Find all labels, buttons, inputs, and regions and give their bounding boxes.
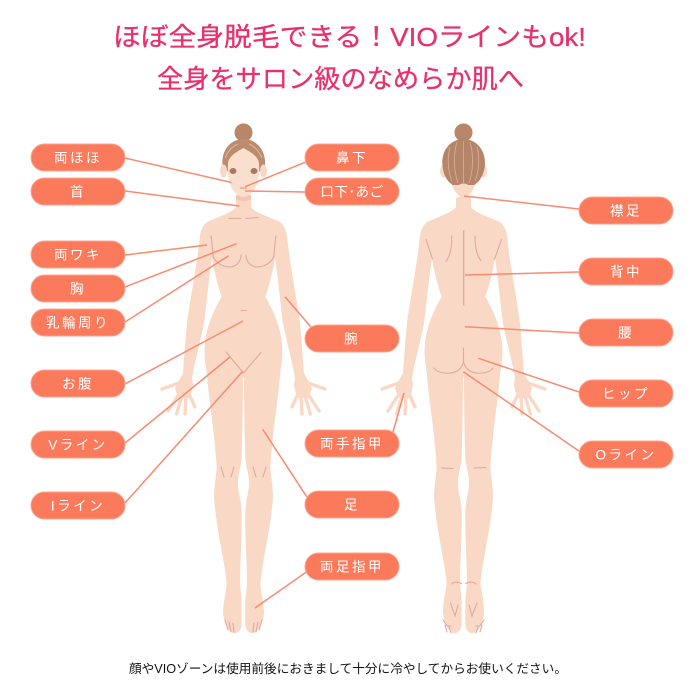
label: Vライン — [31, 431, 125, 458]
label: Oライン: Oライン — [595, 448, 657, 462]
label: 乳輪周り: 乳輪周り — [46, 316, 110, 330]
label: Vライン: Vライン — [48, 438, 108, 452]
label: ヒップ — [579, 380, 673, 407]
label: 足: 足 — [344, 498, 360, 512]
leader lines — [125, 158, 579, 608]
label: 胸 — [31, 275, 125, 302]
label: Iライン: Iライン — [51, 498, 105, 514]
label: Oライン — [579, 441, 673, 468]
hair highlights — [225, 144, 262, 158]
label: 乳輪周り — [31, 309, 125, 336]
label: 両手指甲: 両手指甲 — [320, 436, 384, 452]
icon: front right hand — [292, 383, 325, 414]
hair strands — [448, 141, 479, 183]
label: お腹: お腹 — [62, 376, 94, 392]
figure: front body — [162, 124, 325, 633]
body creases — [211, 218, 276, 632]
figure: back body — [382, 124, 545, 633]
front hair — [222, 139, 265, 172]
label: 口下・あご: 口下･あご — [320, 184, 384, 200]
back hair bun — [454, 124, 472, 142]
label: 両足指甲: 両足指甲 — [320, 560, 384, 574]
label: 腕 — [305, 325, 399, 352]
face — [228, 148, 259, 197]
label: 両ほほ: 両ほほ — [54, 150, 102, 166]
label: 両ワキ: 両ワキ — [54, 248, 102, 262]
label: 口下・あご — [305, 178, 399, 205]
title — [113, 22, 586, 94]
label: 鼻下: 鼻下 — [336, 150, 368, 166]
back creases — [426, 231, 502, 633]
label: 首: 首 — [70, 184, 86, 200]
eyes — [230, 168, 258, 174]
label: 腰: 腰 — [618, 326, 634, 340]
label: ヒップ: ヒップ — [602, 386, 650, 402]
back hair — [442, 139, 485, 185]
label: 背中 — [579, 258, 673, 285]
label: 背中: 背中 — [610, 264, 642, 280]
label: 襟足: 襟足 — [610, 204, 642, 218]
label: 胸: 胸 — [70, 282, 86, 296]
label: お腹 — [31, 370, 125, 397]
icon: ears — [220, 164, 227, 178]
label: 腕: 腕 — [344, 332, 360, 346]
label: 襟足 — [579, 197, 673, 224]
label: 両ワキ — [31, 241, 125, 268]
icon: front left hand — [162, 383, 195, 414]
label: 足 — [305, 491, 399, 518]
title: 全身をサロン級のなめらか肌へ — [157, 64, 524, 94]
label: 両足指甲 — [305, 553, 399, 580]
label: Iライン — [31, 492, 125, 519]
label: 両手指甲 — [305, 430, 399, 457]
title: ほぼ全身脱毛できる！VIOラインもok! — [113, 22, 586, 52]
label: 首 — [31, 178, 125, 205]
label: 鼻下 — [305, 144, 399, 171]
front hair bun — [234, 124, 252, 142]
label: 腰 — [579, 319, 673, 346]
label: 両ほほ — [31, 144, 125, 171]
mouth and nose — [240, 187, 247, 189]
footer note: 顔やVIOゾーンは使用前後におきまして十分に冷やしてからお使いください。 — [129, 661, 567, 676]
neck shadow — [236, 195, 251, 201]
